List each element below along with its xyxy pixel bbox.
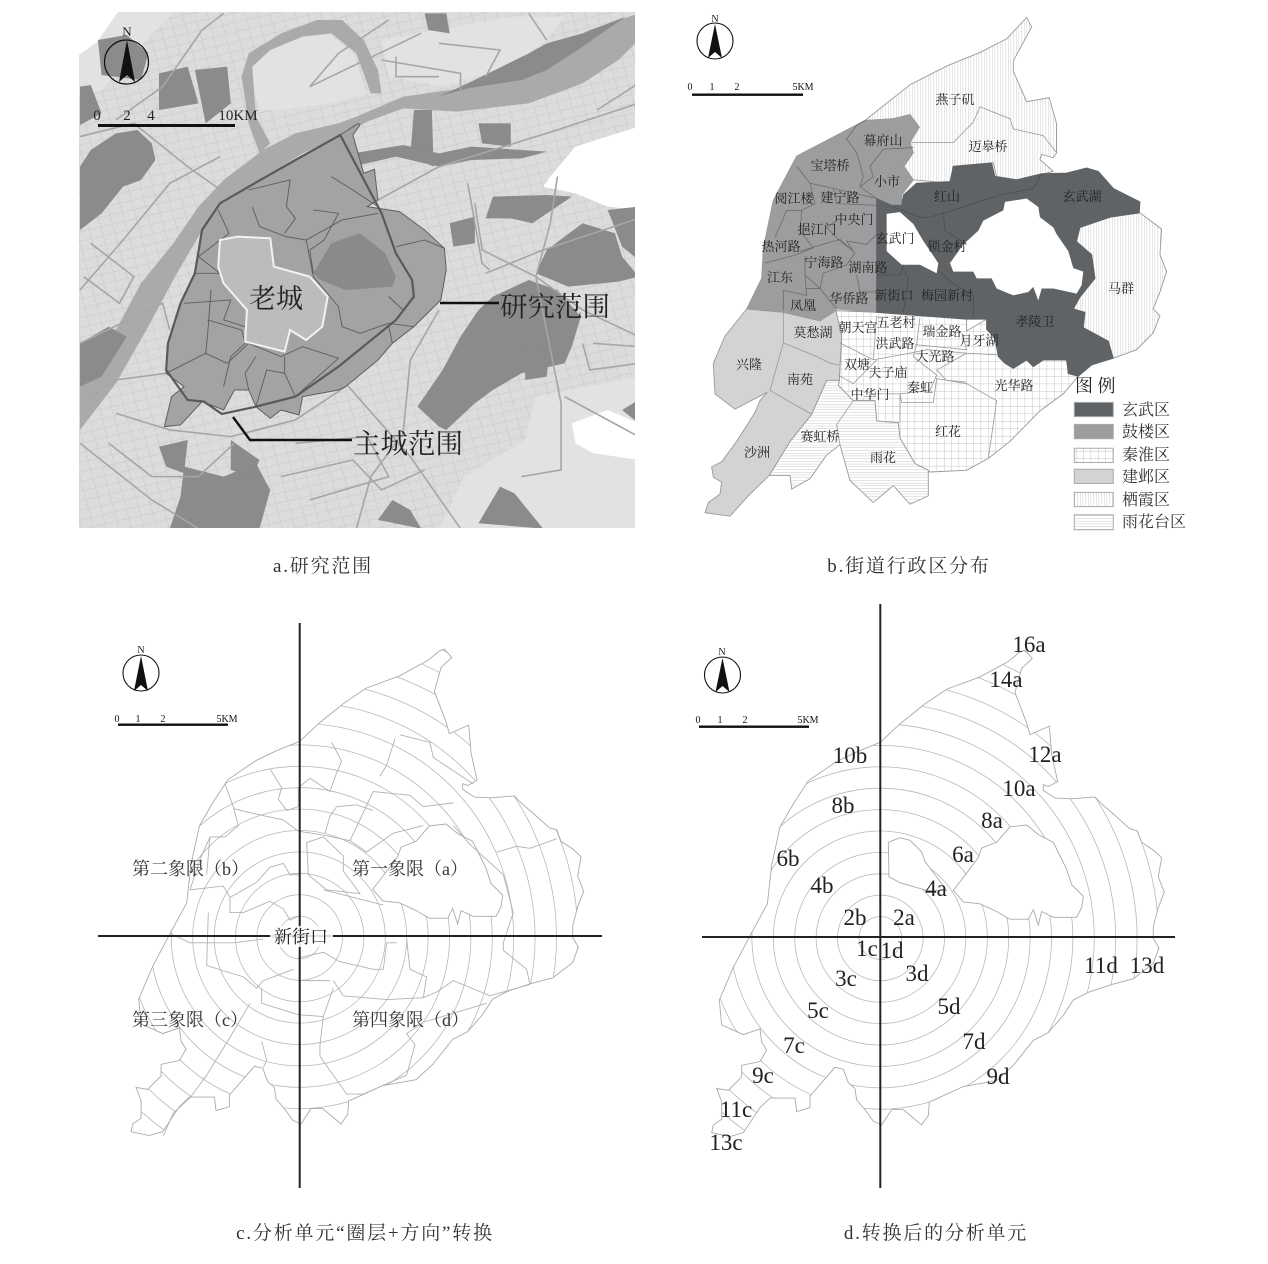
scale bar: 0 [696, 715, 700, 726]
legend labels: 栖霞区 [1122, 491, 1170, 509]
street labels: 热河路 [761, 239, 801, 254]
scale bar: 5KM [792, 82, 814, 93]
Gulou district [747, 115, 919, 321]
street labels: 宁海路 [804, 255, 844, 270]
street labels: 迈皋桥 [968, 139, 1008, 154]
street labels [736, 92, 1134, 465]
north arrow [104, 24, 148, 84]
street labels: 光华路 [994, 378, 1034, 393]
caption a: a.研究范围 [273, 555, 373, 577]
Jianye district [705, 309, 842, 516]
callout: main city [233, 417, 463, 459]
street labels: 玄武湖 [1062, 189, 1102, 204]
Xuanwu lake [950, 199, 1083, 300]
panel c: ring and direction conversion [98, 623, 602, 1242]
Xuanwu district [877, 163, 1140, 376]
unit labels: 1c [856, 936, 878, 961]
scale bar: 1 [718, 715, 722, 726]
unit labels: 14a [989, 667, 1023, 692]
ring arcs [712, 650, 1158, 1132]
caption c: c.分析单元“圈层+方向”转换 [236, 1222, 494, 1244]
unit labels: 3d [906, 961, 929, 986]
north arrow [704, 647, 740, 693]
unit labels: 1d [880, 938, 904, 963]
callout: study area: 研究范围 [500, 291, 610, 322]
legend labels: 鼓楼区 [1122, 423, 1170, 441]
street labels: 锁金村 [927, 239, 967, 254]
district boundaries [163, 735, 557, 1136]
ring arcs [132, 650, 578, 1132]
scale bar [93, 108, 258, 127]
axes [98, 623, 602, 1188]
basemap: roads, water and hills [79, 12, 640, 529]
street labels: 玄武门 [875, 231, 915, 246]
scale bar: 0 [114, 714, 120, 725]
unit labels: 16a [1012, 632, 1046, 657]
street labels: 雨花 [870, 450, 896, 465]
legend labels: 玄武区 [1122, 401, 1170, 419]
north arrow [123, 645, 159, 691]
north arrow: N [122, 24, 132, 39]
scale bar: 2 [734, 82, 740, 93]
callout: main city: 主城范围 [353, 428, 463, 459]
street labels: 夫子庙 [868, 365, 908, 380]
unit labels: 2a [893, 905, 915, 930]
quadrant labels: 第三象限（c） [132, 1010, 248, 1030]
street labels: 挹江门 [797, 222, 837, 237]
unit labels: 3c [835, 966, 857, 991]
unit labels [709, 632, 1165, 1155]
north arrow: N [137, 645, 145, 656]
street labels: 大光路 [915, 349, 955, 364]
street labels: 沙洲 [744, 445, 770, 460]
street labels: 五老村 [876, 315, 916, 330]
caption b: b.街道行政区分布 [827, 555, 991, 577]
street labels: 阅江楼 [774, 191, 814, 206]
district polygons [705, 17, 1167, 530]
unit labels: 4a [925, 876, 947, 901]
panel b: district map [688, 14, 1186, 577]
unit labels: 2b [844, 905, 866, 930]
unit labels: 13c [709, 1130, 743, 1155]
unit labels: 10a [1002, 776, 1036, 801]
unit labels: 11c [720, 1097, 752, 1122]
street labels: 中央门 [834, 212, 874, 227]
Qixia district north [865, 17, 1057, 183]
scale bar: 0 [93, 108, 101, 124]
street labels: 月牙湖 [959, 333, 999, 348]
street labels: 燕子矶 [935, 92, 975, 107]
center label: 新街口 [274, 927, 328, 947]
Yuhuatai district [769, 380, 928, 504]
unit labels: 8a [981, 808, 1003, 833]
street labels: 朝天宫 [838, 320, 878, 335]
scale bar: 4 [147, 108, 155, 124]
legend labels: 雨花台区 [1122, 512, 1186, 531]
street labels: 中华门 [850, 387, 890, 402]
quadrant labels [132, 859, 469, 1030]
Qinhuai district [836, 311, 1078, 472]
street labels: 洪武路 [875, 336, 915, 351]
unit labels: 10b [833, 743, 867, 768]
street labels: 双塘 [844, 357, 870, 372]
scale bar: 0 [688, 82, 692, 93]
unit labels: 8b [832, 793, 854, 818]
legend swatches [1074, 402, 1113, 530]
street labels: 新街口 [874, 288, 914, 303]
main city boundary [166, 135, 414, 414]
label: old city: 老城 [249, 284, 303, 314]
scale bar [688, 82, 814, 96]
unit labels: 5d [938, 994, 961, 1019]
unit labels: 5c [807, 998, 829, 1023]
unit labels: 6b [776, 846, 800, 871]
axes [702, 604, 1175, 1188]
unit labels: 12a [1028, 742, 1062, 767]
scale bar: 10KM [218, 108, 258, 124]
scale bar: 2 [742, 715, 748, 726]
street labels: 马群 [1108, 281, 1134, 296]
north arrow: N [718, 647, 726, 658]
street labels: 莫愁湖 [793, 325, 833, 340]
street labels: 孝陵卫 [1015, 314, 1055, 329]
street labels: 幕府山 [863, 133, 903, 148]
study area fill [164, 123, 446, 427]
panel d: converted analysis units [696, 604, 1175, 1242]
street labels: 建宁路 [820, 190, 860, 205]
scale bar: 5KM [797, 715, 819, 726]
scale bar: 1 [136, 714, 140, 725]
street labels: 红山 [934, 189, 960, 204]
scale bar: 2 [160, 714, 166, 725]
scale bar: 5KM [216, 714, 238, 725]
north arrow: N [711, 14, 719, 25]
street labels: 南苑 [787, 372, 813, 387]
scale bar [696, 715, 819, 728]
unit labels: 4b [810, 873, 834, 898]
unit labels: 11d [1084, 953, 1118, 978]
street labels: 华侨路 [829, 291, 869, 306]
street labels: 江东 [767, 270, 793, 285]
street labels: 秦虹 [907, 380, 933, 395]
scale bar [114, 714, 238, 726]
street labels: 兴隆 [736, 357, 762, 372]
street labels: 红花 [935, 424, 961, 439]
quadrant labels: 第四象限（d） [352, 1010, 469, 1030]
caption d: d.转换后的分析单元 [844, 1222, 1028, 1244]
unit labels: 13d [1130, 953, 1165, 978]
unit outline [712, 650, 1164, 1137]
street labels: 凤凰 [790, 298, 816, 313]
scale bar: 1 [710, 82, 714, 93]
street labels: 赛虹桥 [800, 429, 840, 444]
north arrow [697, 14, 733, 59]
legend labels: 建邺区 [1122, 468, 1170, 486]
unit labels: 7d [962, 1029, 986, 1054]
quadrant labels: 第一象限（a） [352, 859, 468, 879]
unit labels: 6a [952, 842, 974, 867]
street boundaries [765, 107, 1057, 458]
scale bar: 2 [123, 108, 131, 124]
street labels: 湖南路 [848, 260, 888, 275]
legend labels: 秦淮区 [1122, 446, 1170, 464]
Xuanwumen blank area [887, 212, 938, 273]
old city boundary [218, 237, 328, 352]
panel a: study area map [79, 12, 640, 577]
quadrant labels: 第二象限（b） [132, 859, 249, 879]
legend labels [1075, 376, 1186, 531]
street labels: 宝塔桥 [810, 158, 850, 173]
unit labels: 7c [783, 1033, 805, 1058]
unit labels: 9c [752, 1063, 774, 1088]
Qixia district Maqun [1070, 213, 1167, 358]
legend labels: 图 例 [1075, 376, 1116, 396]
unit labels: 9d [986, 1064, 1010, 1089]
street labels: 小市 [874, 174, 900, 189]
unit outline [131, 649, 584, 1136]
street labels: 梅园新村 [921, 288, 973, 303]
street labels: 瑞金路 [922, 324, 962, 339]
